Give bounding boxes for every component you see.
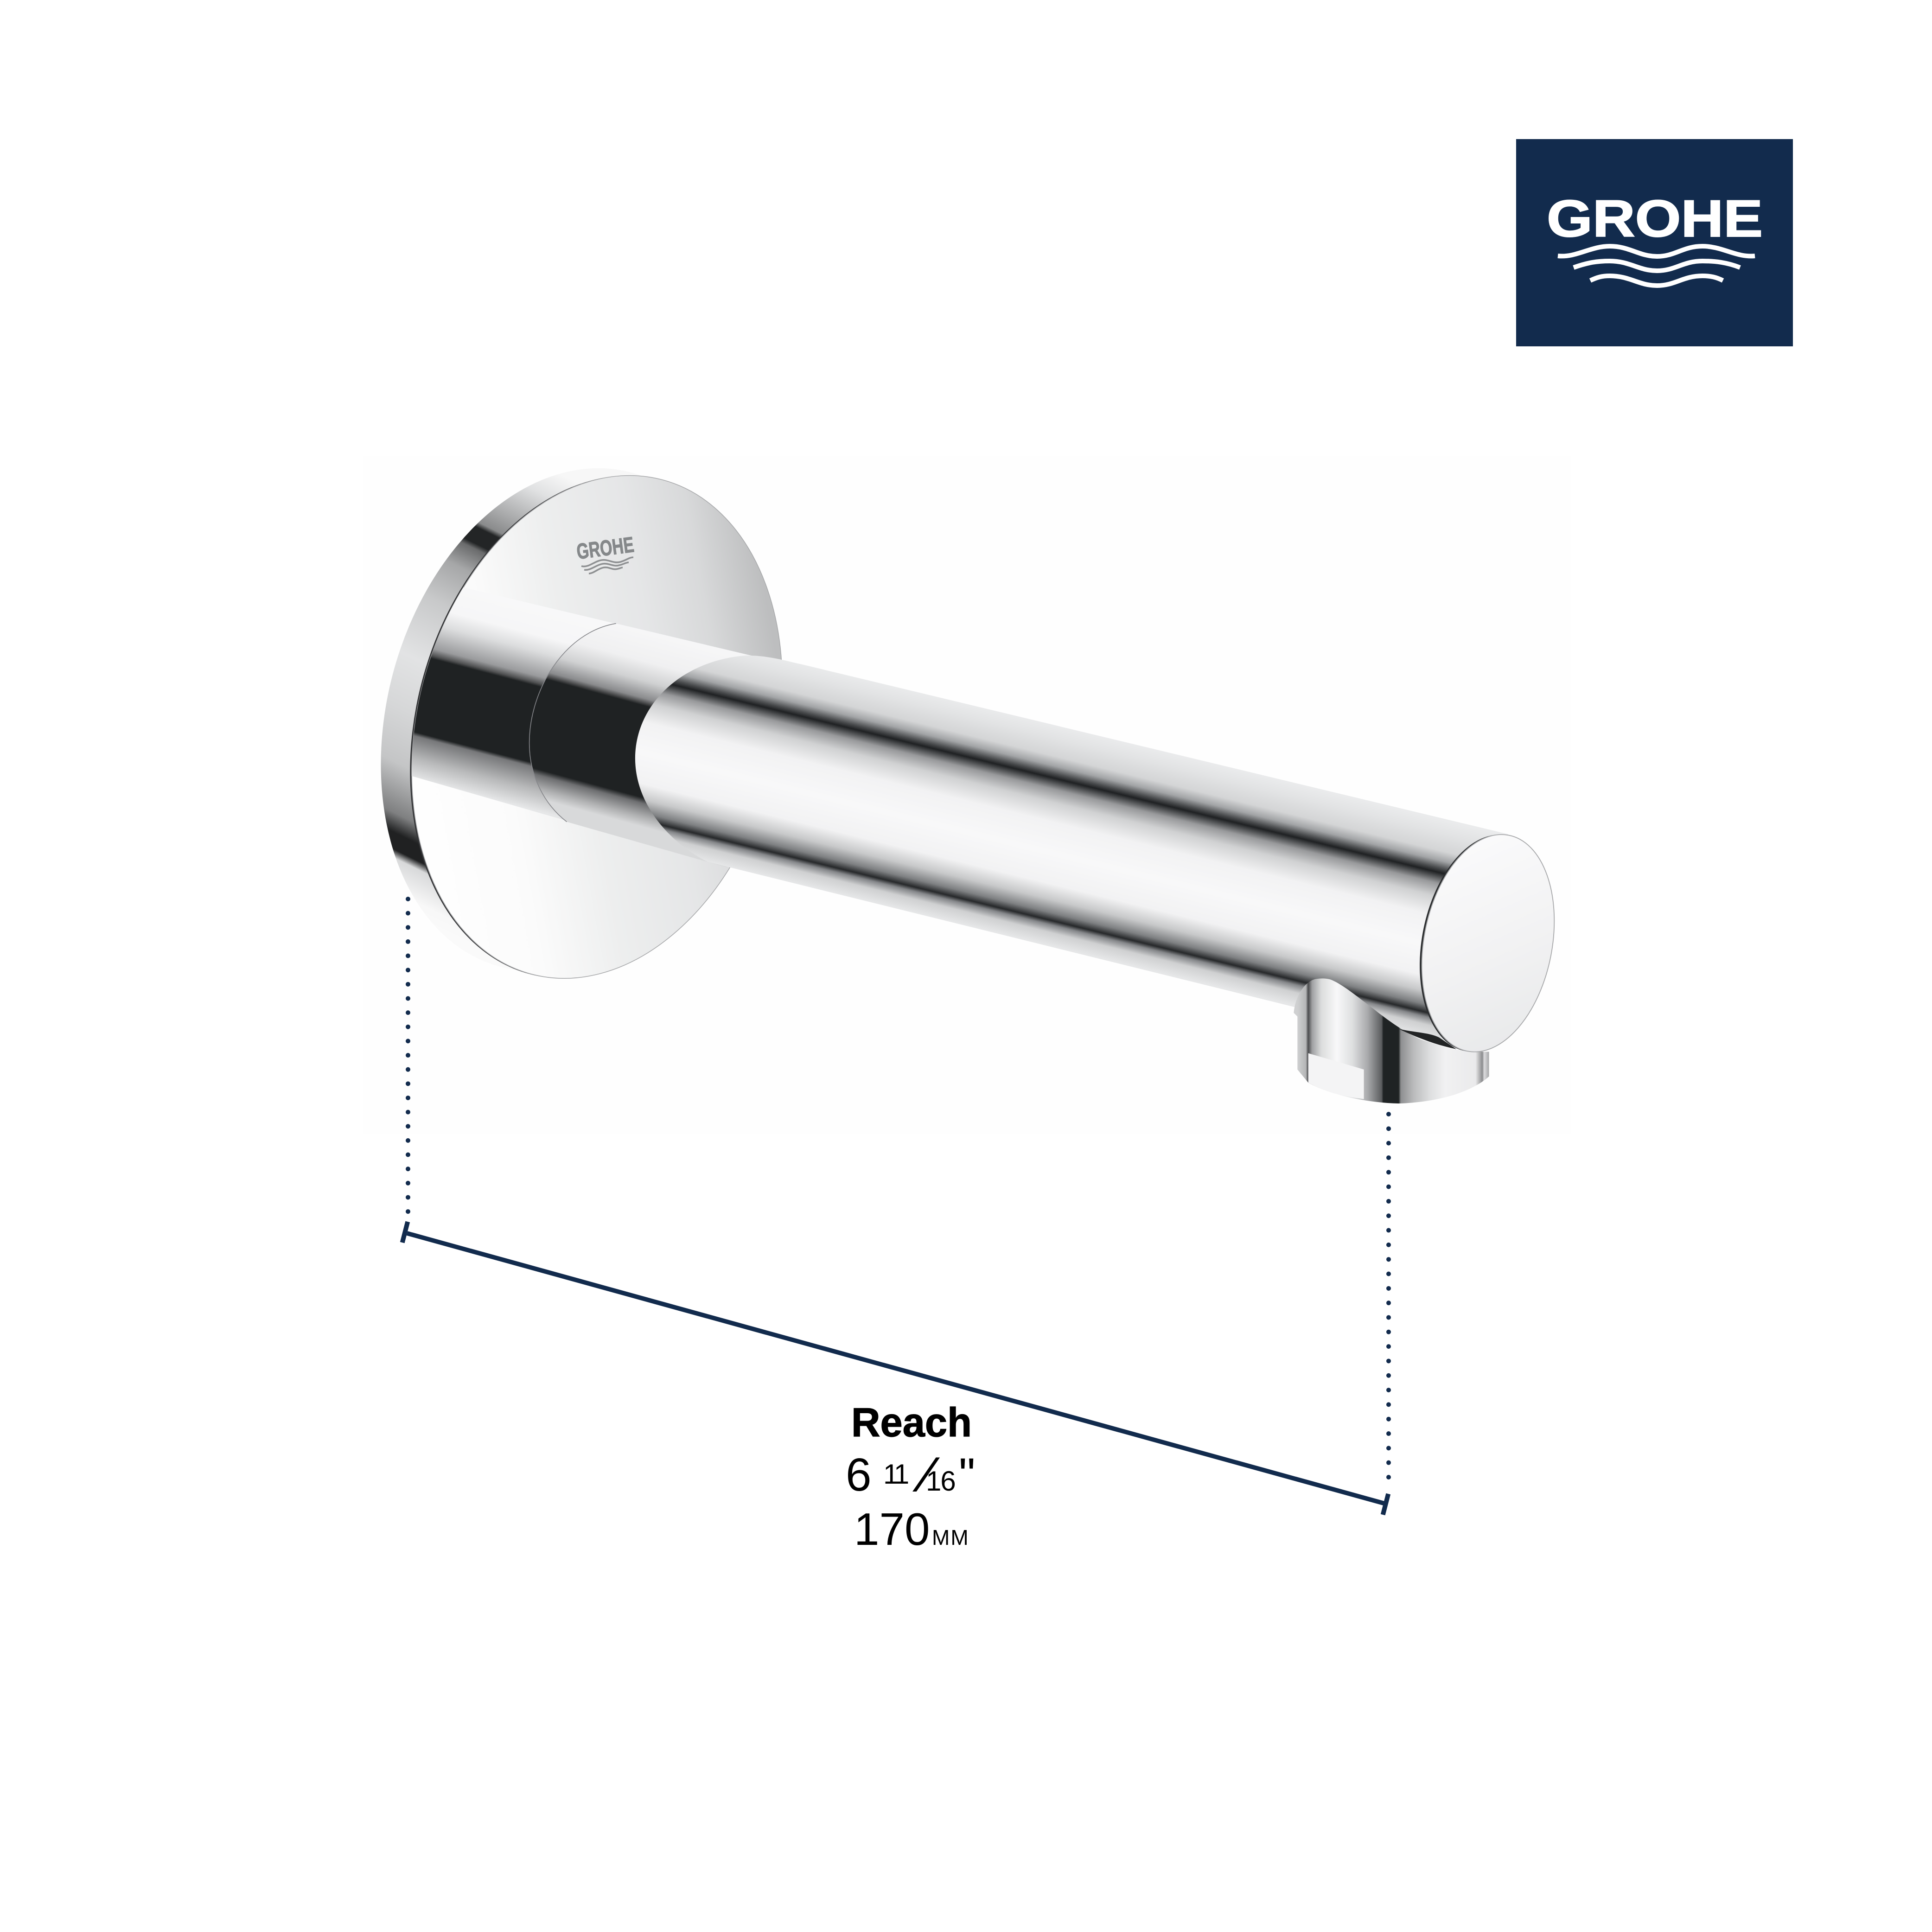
spout end cap rim (1403, 823, 1569, 1063)
engraved waves (581, 557, 633, 574)
dotted guide: outlet side (1386, 1114, 1391, 1478)
dotted guide: plate side (406, 899, 410, 1212)
fraction slash: ⁄ (912, 1447, 940, 1502)
under pipe shadow (1398, 1029, 1456, 1049)
wall plate edge (327, 427, 803, 1013)
heading: Reach (851, 1399, 972, 1445)
wall plate dark rim (357, 434, 834, 1020)
reach dimension line (402, 1222, 1388, 1515)
reach label (846, 1399, 976, 1555)
engraved wordmark: GROHE (575, 532, 635, 564)
inches value: 16 (926, 1466, 955, 1497)
product photo: chrome tub spout (381, 474, 1555, 1103)
main pipe (635, 656, 1508, 1051)
inches value: 6 (846, 1449, 872, 1501)
logo wordmark: GROHE (1547, 190, 1763, 248)
millimetres value: 170 (854, 1504, 930, 1555)
inches value: 11 (883, 1459, 908, 1490)
collar ring seam (529, 624, 616, 822)
engraved logo on plate (575, 532, 635, 574)
millimetres value: MM (932, 1525, 969, 1549)
spout outlet neck (1294, 978, 1489, 1103)
wall plate face (358, 434, 835, 1020)
inches value: " (959, 1449, 976, 1501)
spout end cap (1404, 823, 1572, 1063)
outlet flat facet (1308, 1053, 1364, 1099)
collar ring (529, 624, 764, 867)
collar base clipped to plate (412, 587, 614, 820)
logo waves (1558, 246, 1755, 286)
GROHE logo (1516, 139, 1793, 346)
